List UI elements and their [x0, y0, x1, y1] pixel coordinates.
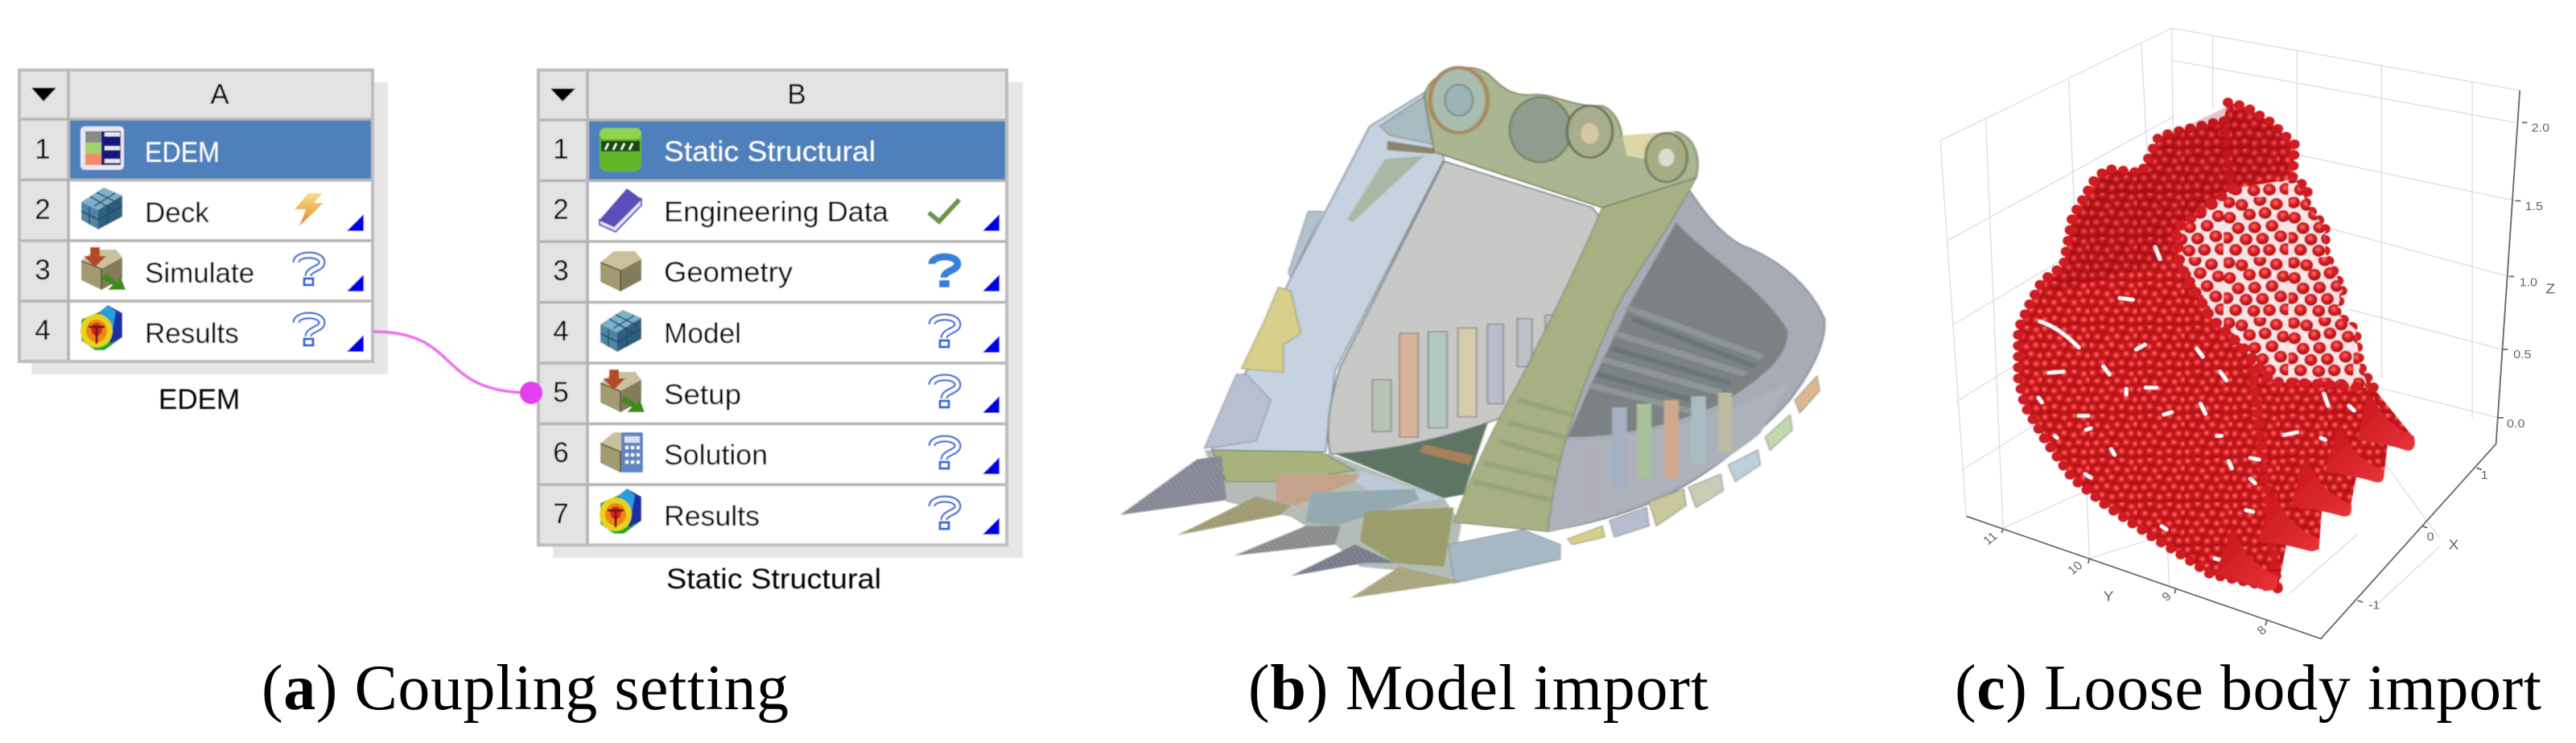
update triangle 2: [347, 214, 364, 231]
panel: loose body 3D scatter plot: [1940, 28, 2555, 638]
row numbers B: 3: [553, 255, 569, 287]
lower dark throat: [1335, 420, 1489, 507]
axis labels: 1.5: [2525, 200, 2543, 213]
side wear pads: [1568, 376, 1820, 544]
icon: setup: [600, 369, 645, 412]
gaps between particles: [2038, 247, 2354, 560]
axis labels: 11: [1981, 530, 2001, 548]
particle cloud: [2018, 102, 2415, 591]
update triangle 3: [983, 274, 999, 291]
plot axes: [1966, 90, 2527, 638]
system name EDEM: EDEM: [159, 384, 240, 415]
update triangle 4: [347, 335, 364, 352]
icon: results: [80, 305, 122, 350]
status: check mark: [929, 200, 959, 221]
label EDEM: EDEM: [145, 137, 220, 168]
lower throat backing: [1205, 450, 1461, 581]
axis labels: Y: [2104, 588, 2114, 604]
icon: engineering data book: [600, 188, 641, 232]
plot box and grid: [1940, 28, 2520, 607]
panel: excavator bucket model: [1120, 68, 1824, 598]
dense particle body: [2018, 102, 2414, 591]
icon: model: [600, 310, 641, 352]
icon: deck cube: [81, 188, 122, 229]
icon: results: [600, 489, 641, 534]
axis labels: 1: [2481, 469, 2488, 482]
row numbers B: [553, 134, 569, 530]
icon: solution: [600, 432, 643, 473]
axis labels: -1: [2368, 599, 2380, 612]
axis labels: 8: [2255, 624, 2269, 638]
label Solution: Solution: [664, 440, 768, 471]
axis labels: X: [2448, 536, 2459, 553]
status: unknown: [296, 255, 322, 285]
row numbers B: 5: [553, 377, 569, 408]
icon: EDEM logo: [80, 126, 124, 170]
header A: A: [210, 79, 229, 110]
label Geometry: Geometry: [664, 257, 793, 288]
bucket dark interior: [1568, 222, 1787, 437]
row numbers A: 1: [35, 134, 51, 165]
dropdown arrow A: [31, 88, 56, 101]
left blue side plate: [1212, 93, 1444, 452]
caption b: (b) Model import: [1248, 653, 1708, 724]
dropdown arrow B: [550, 89, 575, 101]
upper gusset: [1348, 97, 1434, 222]
label Results: Results: [145, 318, 239, 349]
row numbers B: 7: [553, 498, 569, 530]
rear ribs and lower shell: [1548, 382, 1790, 531]
panel: coupling setting: [18, 68, 1023, 595]
sparse particles: [2176, 179, 2368, 388]
label Simulate: Simulate: [145, 258, 254, 289]
teeth: [1120, 456, 1464, 598]
status: unknown: [932, 317, 958, 347]
status: unknown solid: [932, 257, 958, 287]
sparse particle zone: [2176, 179, 2368, 388]
system name Static Structural: Static Structural: [666, 563, 881, 595]
axis labels: 0.5: [2513, 349, 2532, 361]
gray centre plate: [1328, 161, 1620, 454]
table A: EDEM system: [18, 68, 388, 415]
icon: static structural: [600, 128, 641, 171]
status: unknown: [932, 499, 958, 529]
label Results: Results: [664, 501, 760, 532]
axis labels: Z: [2545, 280, 2555, 296]
row numbers A: 2: [35, 194, 51, 225]
lifting lugs: [1424, 68, 1698, 208]
axis labels: 10: [2065, 559, 2086, 578]
label Engineering Data: Engineering Data: [664, 196, 889, 228]
axis labels: 9: [2159, 590, 2174, 604]
update triangle 4: [983, 336, 999, 353]
row numbers A: 4: [35, 315, 51, 346]
label Setup: Setup: [664, 379, 741, 411]
axis labels: 0: [2427, 530, 2434, 544]
beaded outline: [2018, 102, 2375, 588]
caption a: (a) Coupling setting: [262, 653, 789, 724]
row numbers B: 6: [553, 437, 569, 469]
teeth particles: [2215, 388, 2415, 591]
status: unknown: [296, 316, 322, 345]
update triangle 6: [983, 457, 999, 474]
caption c: (c) Loose body import: [1955, 653, 2541, 724]
sparse zone border beads: [2176, 189, 2368, 388]
inner stiffener bars: [1372, 315, 1563, 437]
row numbers B: 1: [553, 134, 569, 165]
row numbers B: 2: [553, 194, 569, 225]
header B: B: [787, 79, 806, 110]
left wear plates: [1205, 211, 1323, 448]
label Model: Model: [664, 318, 741, 349]
row numbers B: 4: [553, 316, 569, 347]
axis labels: 1.0: [2520, 276, 2537, 289]
row numbers A: 3: [35, 254, 51, 286]
green side band: [1454, 174, 1696, 531]
update triangle 7: [983, 518, 999, 535]
table B: Static Structural system: [537, 68, 1023, 595]
icon: lightning: [295, 193, 324, 226]
label Deck: Deck: [145, 197, 209, 229]
update triangle 5: [983, 396, 999, 413]
darker upper dense zone: [2046, 106, 2289, 293]
row numbers A: [35, 134, 51, 346]
connector: Results to Setup: [373, 332, 542, 404]
axis labels: 2.0: [2532, 122, 2549, 135]
update triangle 2: [983, 214, 999, 231]
icon: simulate: [81, 247, 126, 290]
axis labels: [1981, 122, 2555, 638]
label Static Structural: Static Structural: [664, 136, 876, 167]
status: unknown: [932, 378, 958, 407]
bucket right shell: [1548, 185, 1824, 531]
update triangle 3: [347, 274, 364, 291]
status: unknown: [932, 439, 958, 469]
axis labels: 0.0: [2507, 417, 2525, 431]
tooth adapters: [1212, 450, 1560, 584]
icon: geometry box: [600, 251, 641, 291]
